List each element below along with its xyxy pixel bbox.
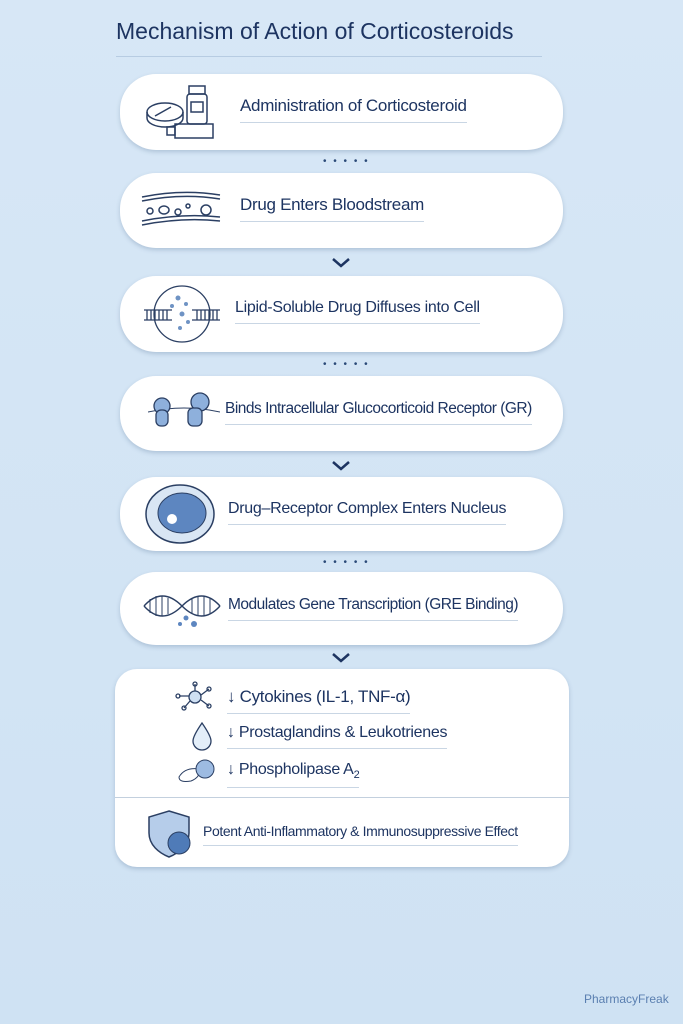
- text: outcome: [203, 823, 518, 846]
- icon: blood vessel: [142, 192, 220, 226]
- arrow: chevron: [332, 653, 350, 662]
- text: [228, 596, 518, 621]
- icon: droplet: [192, 722, 212, 751]
- card 1: administration: [120, 74, 563, 150]
- text: prostaglandins: ↓ Prostaglandins & Leukotrienes: [227, 724, 447, 741]
- icon: cell membrane: [144, 285, 220, 343]
- card 5: nucleus: [120, 477, 563, 551]
- text: Drug–Receptor Complex Enters Nucleus: [228, 500, 506, 517]
- text: [235, 299, 480, 324]
- title: [116, 18, 542, 57]
- text: Binds Intracellular Glucocorticoid Receptor (GR): [225, 400, 532, 417]
- text: [225, 400, 532, 425]
- connector dots: • • • • •: [323, 557, 370, 568]
- text: prostaglandins: [227, 724, 447, 749]
- icon: nucleus: [145, 484, 215, 544]
- text: [228, 500, 506, 525]
- text: Administration of Corticosteroid: [240, 96, 467, 115]
- panel: effects: [115, 669, 569, 867]
- title: Mechanism of Action of Corticosteroids: [116, 18, 514, 44]
- card 4: receptor binding: [120, 376, 563, 451]
- icon: cytokine: [175, 681, 212, 711]
- icon: pill, bottle, tube: [146, 85, 214, 139]
- card 3: diffusion: [120, 276, 563, 352]
- icon: shield: [148, 810, 190, 858]
- icon: DNA: [144, 595, 220, 627]
- connector dots: • • • • •: [323, 156, 370, 167]
- footer brand: PharmacyFreak: [584, 992, 669, 1006]
- card 6: gene transcription: [120, 572, 563, 645]
- text: Lipid-Soluble Drug Diffuses into Cell: [235, 299, 480, 316]
- icon: receptor proteins: [148, 392, 220, 427]
- arrow: chevron: [332, 461, 350, 470]
- text: Drug Enters Bloodstream: [240, 195, 424, 214]
- arrow: chevron: [332, 258, 350, 268]
- divider: [115, 797, 569, 798]
- text: phospholipase: ↓ Phospholipase A2: [227, 761, 359, 781]
- icon: phospholipase: [178, 760, 214, 782]
- text: cytokines: ↓ Cytokines (IL-1, TNF-α): [227, 687, 410, 706]
- text: Modulates Gene Transcription (GRE Binding): [228, 596, 518, 613]
- text: outcome: Potent Anti-Inflammatory & Immunosuppressive Effect: [203, 823, 518, 839]
- connector dots: • • • • •: [323, 359, 370, 370]
- card 2: bloodstream: [120, 173, 563, 248]
